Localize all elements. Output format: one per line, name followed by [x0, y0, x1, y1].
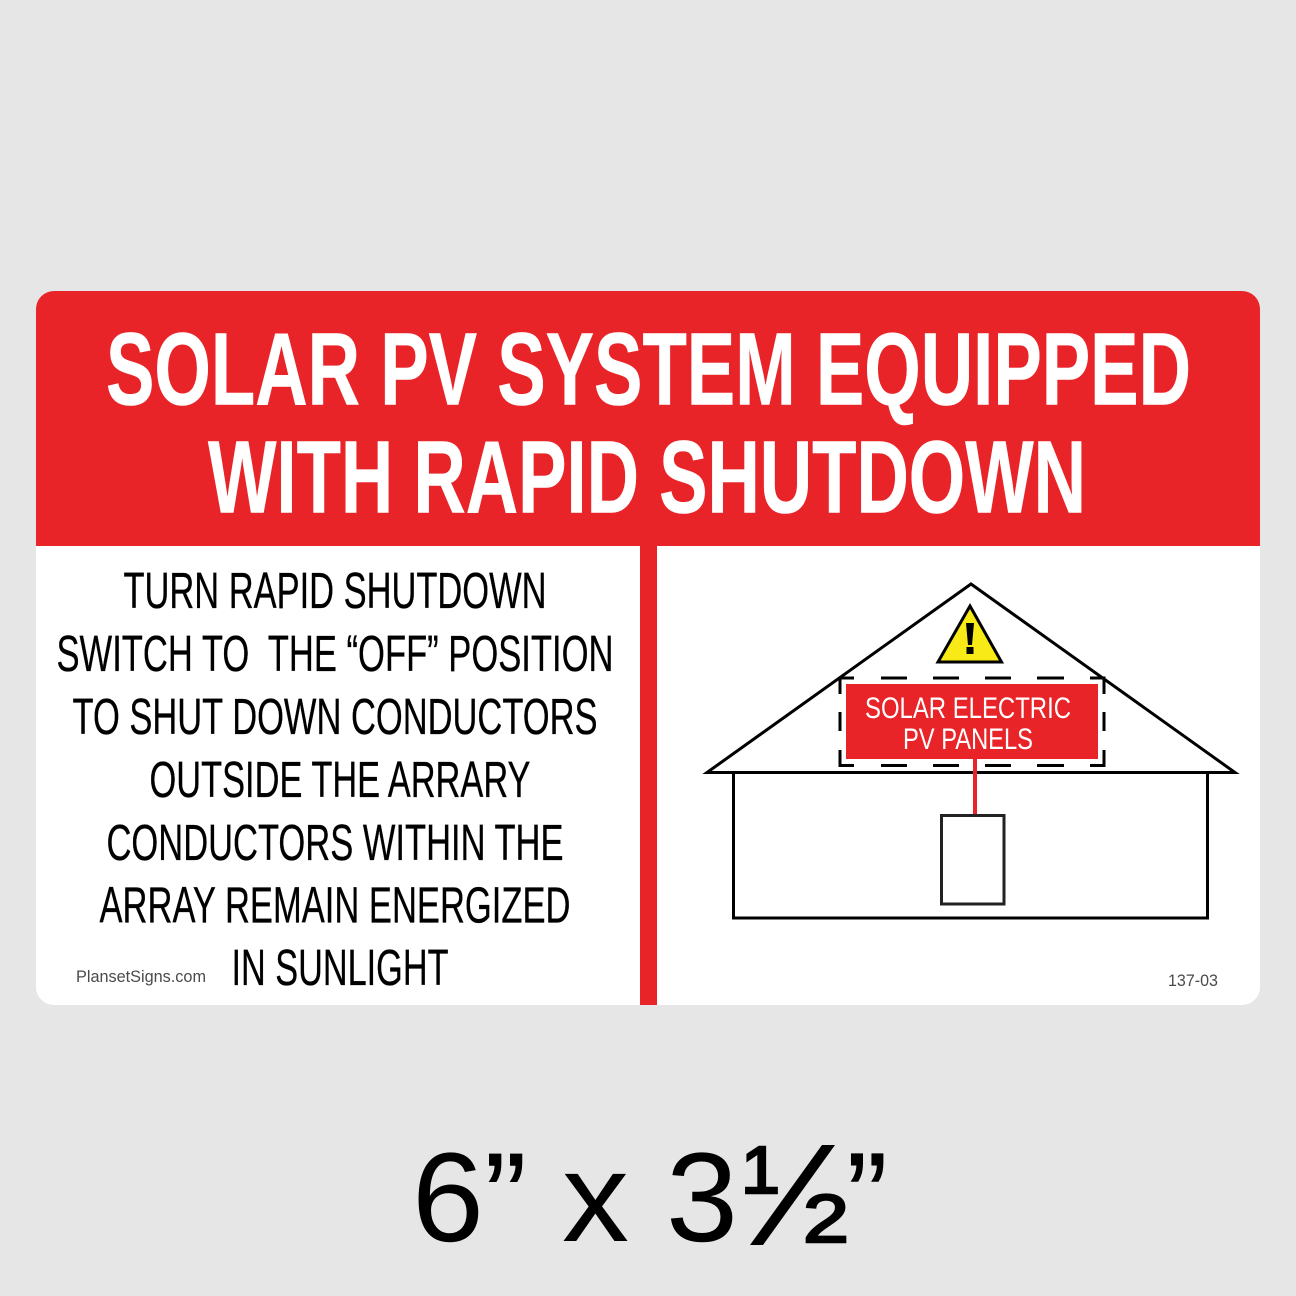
- vertical red divider: [640, 546, 657, 1005]
- fraction one half: 2: [803, 1181, 849, 1257]
- red conduit line: [973, 759, 977, 815]
- house diagram: [707, 584, 1235, 918]
- heading: [106, 312, 1191, 534]
- size caption: x: [562, 1126, 629, 1268]
- text block: instructions: TO SHUT DOWN CONDUCTORS: [72, 688, 598, 745]
- text block: instructions: [56, 562, 614, 996]
- text block: instructions: OUTSIDE THE ARRARY: [150, 751, 530, 808]
- roof: [707, 584, 1235, 772]
- panel label box: PV PANELS: [903, 723, 1033, 756]
- size caption: ”: [846, 1126, 888, 1268]
- sign white base: [36, 291, 1260, 1005]
- panel label box: SOLAR ELECTRIC: [865, 692, 1071, 725]
- size caption: 6”: [412, 1126, 527, 1268]
- panel label box: [846, 684, 1098, 759]
- text block: instructions: ARRAY REMAIN ENERGIZED: [100, 876, 570, 934]
- icon: warning triangle: [938, 606, 1002, 662]
- website credit: PlansetSigns.com: [76, 967, 206, 986]
- size caption: 3: [666, 1126, 738, 1268]
- text block: instructions: CONDUCTORS WITHIN THE: [106, 814, 564, 871]
- disconnect switch box: [942, 816, 1004, 904]
- panel: sign: [36, 291, 1260, 1005]
- part number: 137-03: [1168, 972, 1218, 990]
- text block: instructions: TURN RAPID SHUTDOWN: [124, 562, 546, 619]
- size caption: [412, 1126, 888, 1268]
- text block: instructions: IN SUNLIGHT: [232, 939, 448, 996]
- house walls: [734, 773, 1208, 918]
- dashed panel outline: [840, 678, 1104, 766]
- fraction one half: [741, 1133, 849, 1257]
- panel: red header band: [36, 291, 1260, 546]
- text block: instructions: SWITCH TO THE “OFF” POSITION: [56, 625, 614, 682]
- fraction one half: 1: [741, 1133, 780, 1208]
